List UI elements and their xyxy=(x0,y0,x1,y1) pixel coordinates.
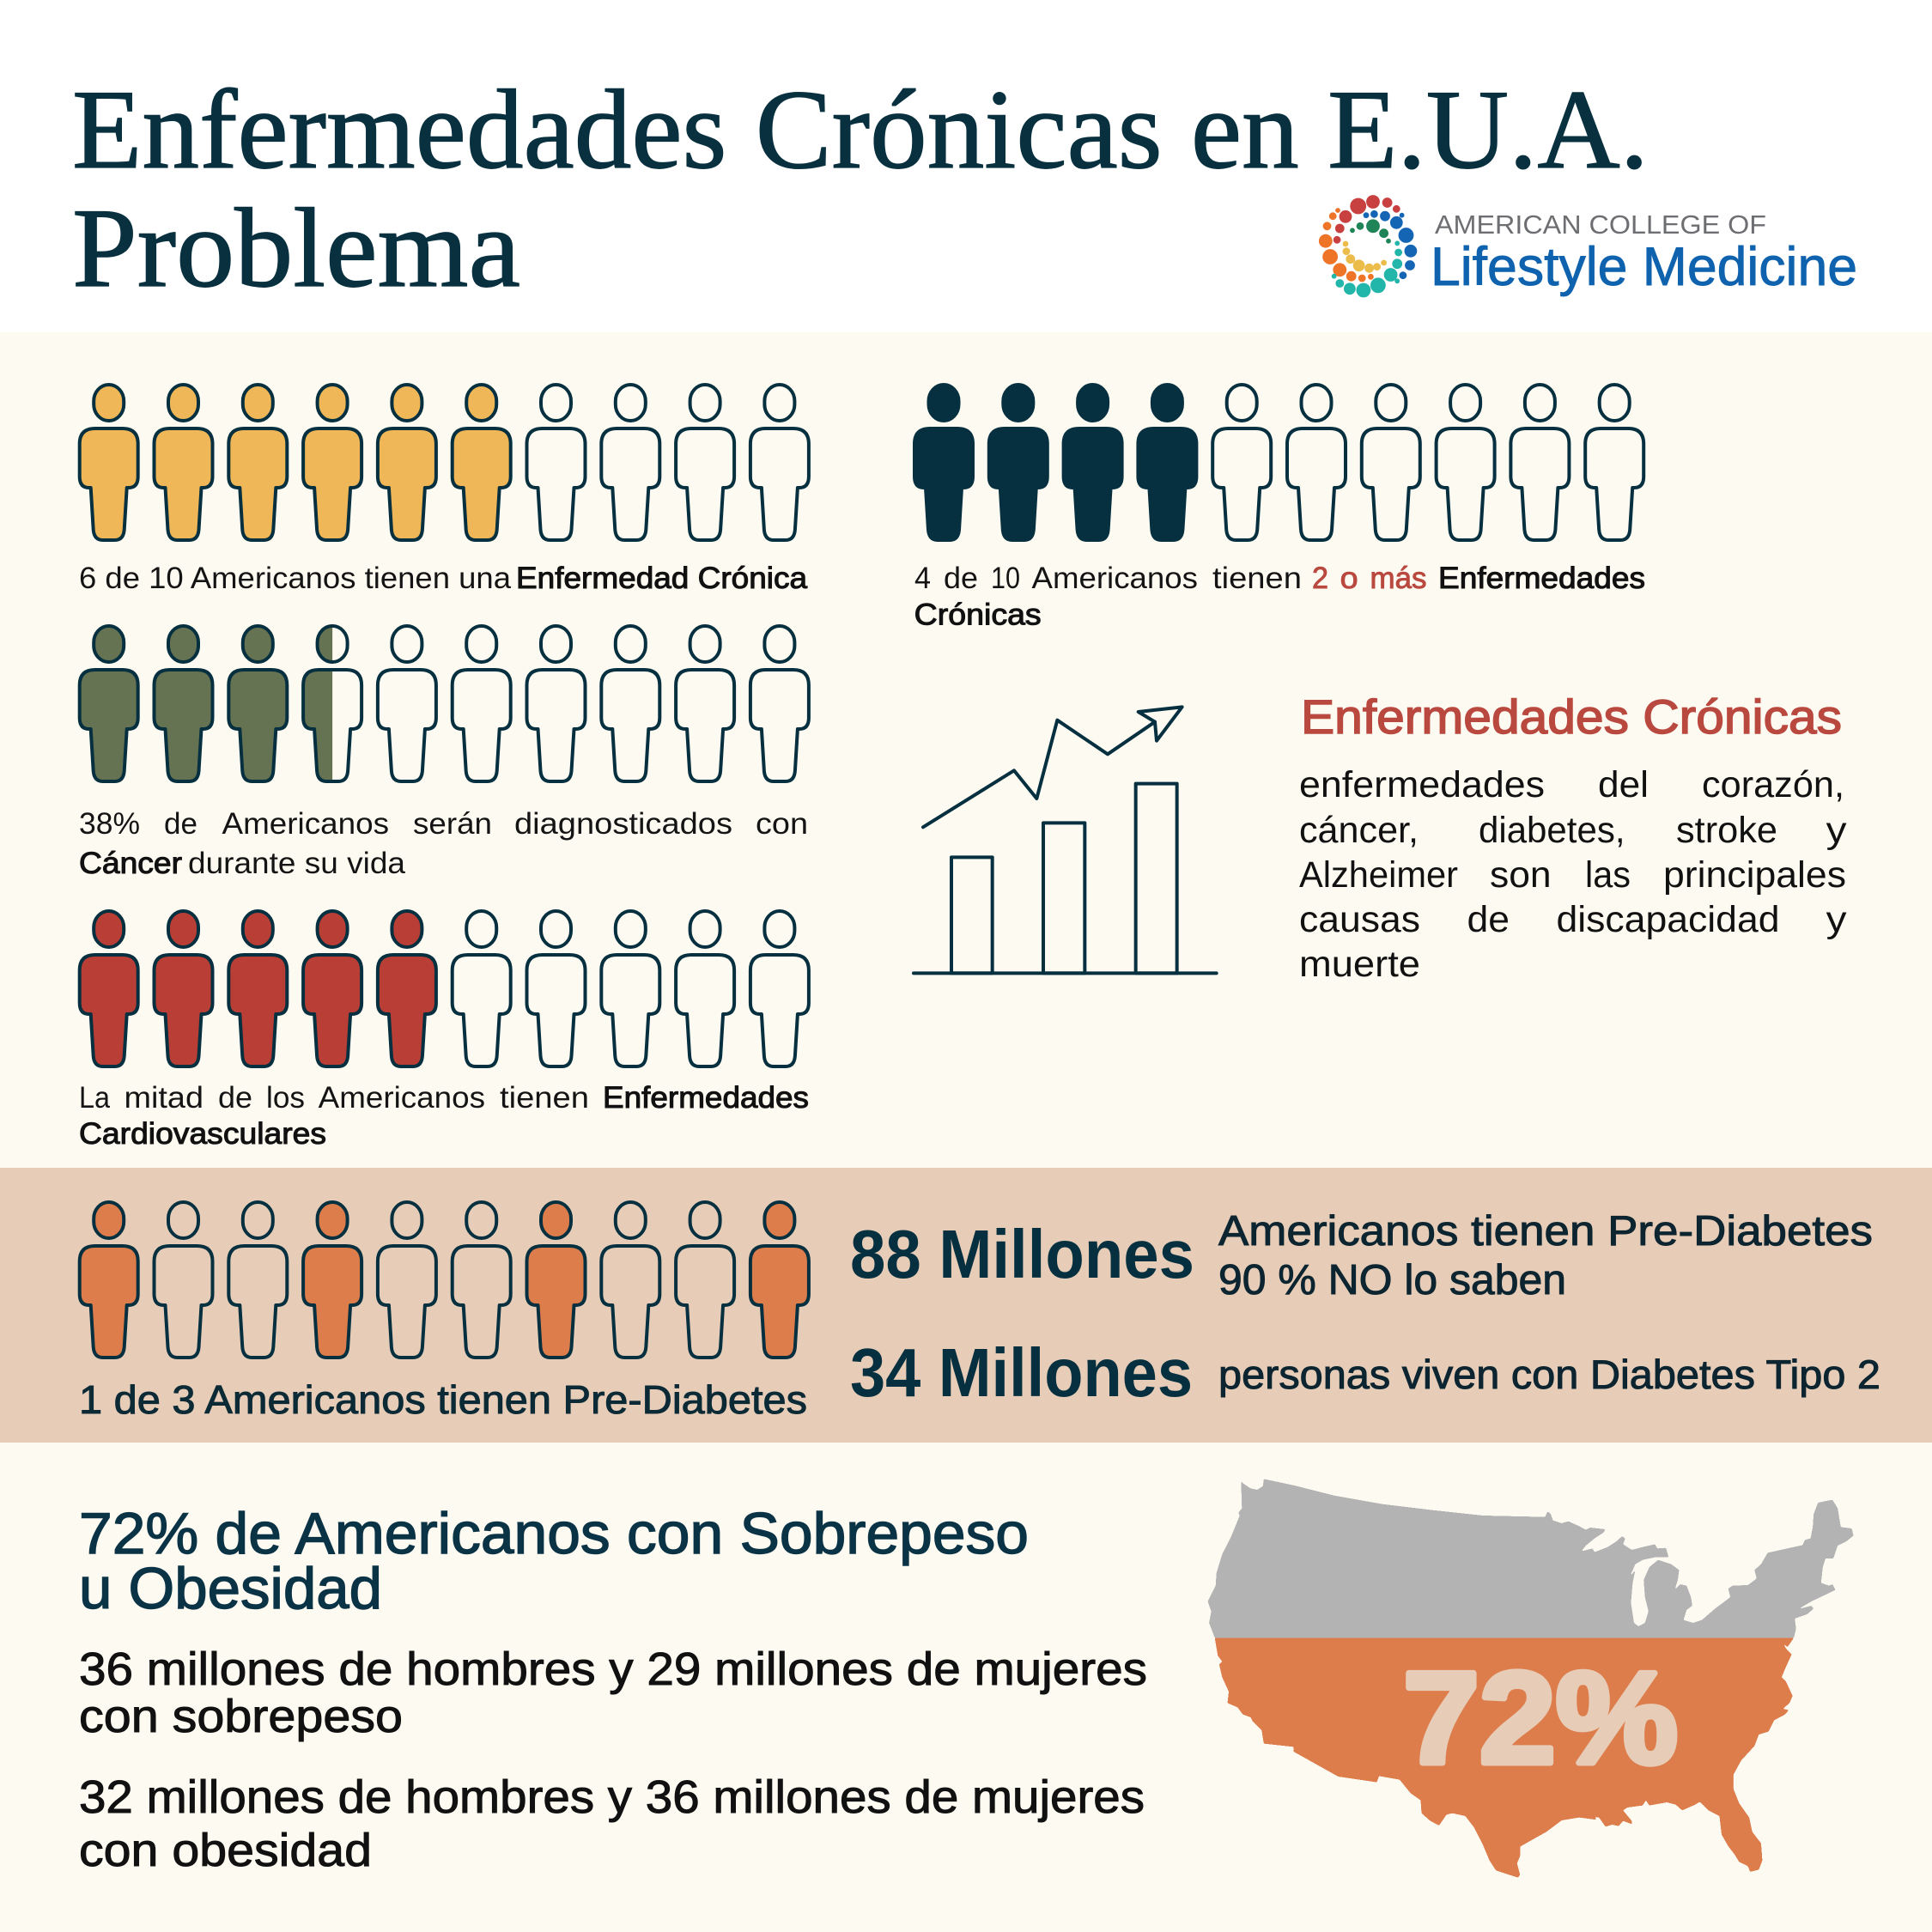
heading: u Obesidad xyxy=(79,1556,382,1621)
caption xyxy=(79,1081,809,1151)
text: obesity: 32 millones de hombres y 36 millones de mujeres xyxy=(79,1771,1145,1823)
paragraph: diabetes, xyxy=(1479,810,1625,851)
caption: Americanos xyxy=(1032,562,1198,595)
paragraph: Alzheimer xyxy=(1299,854,1458,896)
paragraph: discapacidad xyxy=(1556,899,1779,940)
white header background xyxy=(0,0,1932,332)
title: Enfermedades Crónicas en E.U.A. xyxy=(72,66,1649,192)
paragraph: y xyxy=(1826,810,1847,851)
panel: 4 de 10 with two or more chronic diseases xyxy=(914,385,1645,632)
paragraph: enfermedades xyxy=(1299,764,1545,805)
title: Problema xyxy=(72,185,520,311)
map label: 72% xyxy=(1403,1645,1678,1791)
heading xyxy=(79,1501,1029,1621)
pictogram: 6 filled of 10 yellow xyxy=(80,385,809,540)
stat text: pre-diabetes xyxy=(1218,1208,1873,1303)
paragraph: son xyxy=(1490,854,1552,896)
caption xyxy=(79,807,808,880)
text: overweight: 36 millones de hombres y 29 millones de mujeres xyxy=(79,1643,1147,1695)
caption: Enfermedades xyxy=(603,1081,809,1115)
logo text: Lifestyle Medicine: Lifestyle Medicine xyxy=(1431,237,1857,297)
paragraph xyxy=(1299,764,1847,985)
caption: Americanos xyxy=(319,1081,485,1115)
caption: con xyxy=(756,807,808,841)
caption: tienen xyxy=(1212,562,1302,595)
paragraph: causas xyxy=(1299,899,1420,940)
paragraph: muerte xyxy=(1299,944,1420,985)
caption: más xyxy=(1370,562,1427,595)
caption: los xyxy=(266,1081,305,1115)
caption: durante su vida xyxy=(188,847,406,880)
caption: de xyxy=(218,1081,252,1115)
caption: 10 xyxy=(991,562,1020,595)
caption: 4 xyxy=(914,562,931,595)
logo: American College of Lifestyle Medicine xyxy=(1320,196,1857,297)
caption: o xyxy=(1340,562,1358,595)
band background xyxy=(0,1168,1932,1443)
stat text: pre-diabetes: Americanos tienen Pre-Diabetes xyxy=(1218,1208,1873,1255)
text: obesity: con obesidad xyxy=(79,1825,372,1876)
caption: Enfermedades xyxy=(1438,562,1645,595)
panel: 6 de 10 with a chronic disease xyxy=(79,385,809,595)
caption: Cáncer xyxy=(79,847,182,880)
caption: La xyxy=(79,1081,110,1115)
heading: Enfermedades Crónicas xyxy=(1301,690,1842,744)
map: United States 72% filled xyxy=(1208,1479,1854,1878)
pictogram: 4 of 10 navy xyxy=(914,385,1643,540)
caption: 1 de 3 Americanos tienen Pre-Diabetes xyxy=(79,1377,807,1422)
heading: 72% de Americanos con Sobrepeso xyxy=(79,1501,1029,1566)
panel: pre-diabetes band xyxy=(0,1168,1932,1443)
title xyxy=(72,66,1649,311)
text: overweight: con sobrepeso xyxy=(79,1691,403,1742)
paragraph: y xyxy=(1826,899,1847,940)
caption: Cardiovasculares xyxy=(79,1117,326,1151)
panel: half have cardiovascular disease xyxy=(79,911,809,1151)
text: obesity xyxy=(79,1771,1145,1876)
paragraph: de xyxy=(1467,899,1510,940)
logo text: American College of: AMERICAN COLLEGE OF xyxy=(1435,210,1766,240)
caption xyxy=(79,562,808,595)
pictogram: 3.8 of 10 green xyxy=(80,626,809,781)
pictogram: 5 of 10 red xyxy=(80,911,809,1066)
icon: coloured dot ring xyxy=(1320,196,1416,297)
caption xyxy=(914,562,1645,632)
paragraph: corazón, xyxy=(1702,764,1844,805)
stat: 88 millones: 88 Millones xyxy=(850,1216,1194,1292)
caption: tienen xyxy=(500,1081,589,1115)
panel: overweight and obesity xyxy=(79,1501,1147,1876)
stat: 34 millones: 34 Millones xyxy=(850,1334,1193,1411)
caption: 2 xyxy=(1312,562,1328,595)
caption: de xyxy=(164,807,197,841)
stat text: type 2 diabetes: personas viven con Diabetes Tipo 2 xyxy=(1218,1352,1880,1397)
pictogram: 1 of 3 orange xyxy=(80,1202,809,1358)
paragraph: principales xyxy=(1663,854,1846,896)
paragraph: stroke xyxy=(1676,810,1777,851)
panel: chronic diseases definition xyxy=(1299,690,1847,985)
icon: rising bar chart with arrow xyxy=(914,707,1217,973)
caption: Crónicas xyxy=(914,598,1042,632)
stat text: pre-diabetes: 90 % NO lo saben xyxy=(1218,1257,1566,1303)
caption: serán xyxy=(413,807,492,841)
panel: 38% diagnosed with cancer xyxy=(79,626,809,880)
caption: 38% xyxy=(79,807,140,841)
text: overweight xyxy=(79,1643,1147,1742)
paragraph: cáncer, xyxy=(1299,810,1419,851)
caption: 6 de 10 Americanos tienen una xyxy=(79,562,512,595)
caption: Enfermedad Crónica xyxy=(516,562,808,595)
paragraph: del xyxy=(1598,764,1649,805)
caption: mitad xyxy=(124,1081,204,1115)
caption: Americanos xyxy=(222,807,389,841)
caption: de xyxy=(944,562,978,595)
caption: diagnosticados xyxy=(514,807,732,841)
paragraph: las xyxy=(1585,854,1631,896)
